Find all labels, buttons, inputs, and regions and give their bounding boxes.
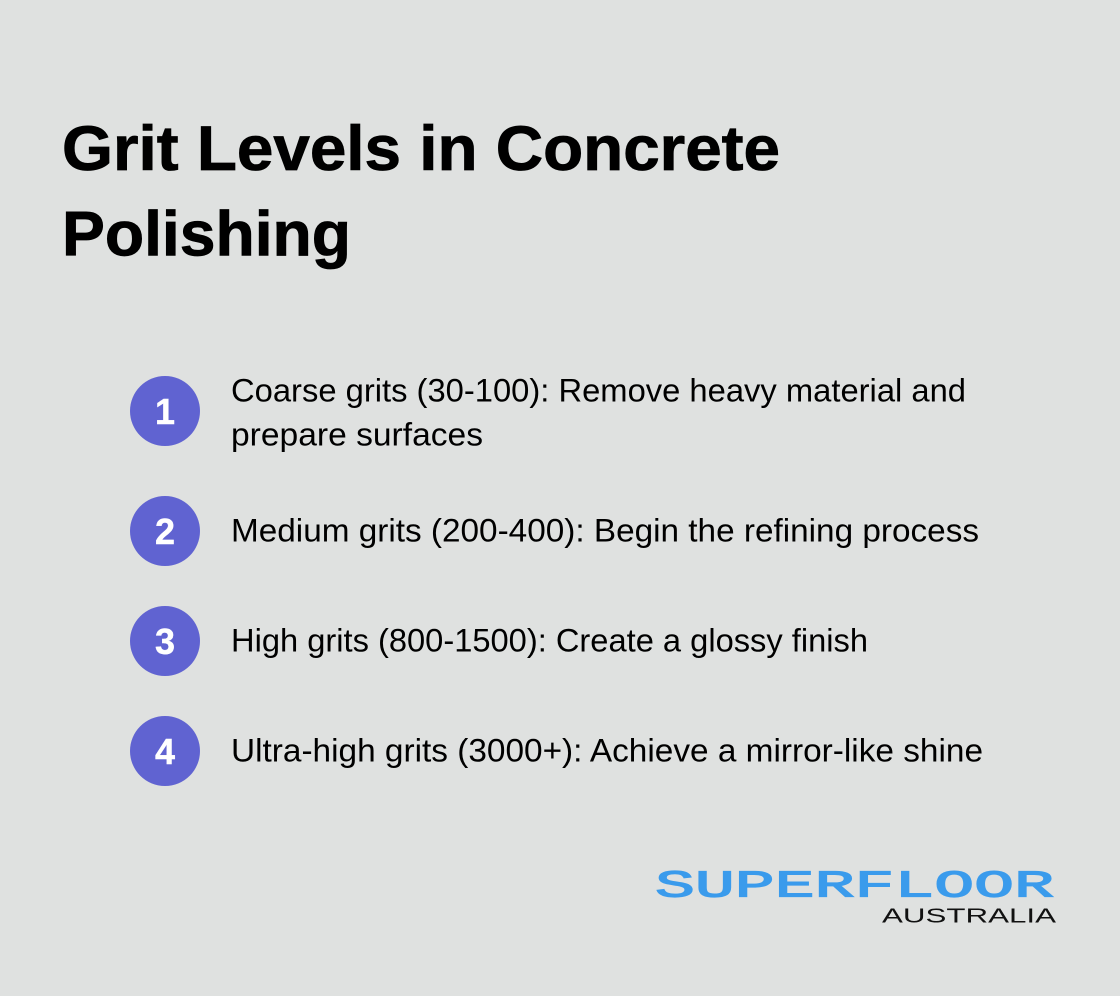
logo: Superfloor Australia: AUSTRALIA: [882, 906, 1057, 928]
item 1: coarse grits: [130, 372, 966, 452]
text: ultra-high grits: Ultra-high grits (3000+): Achieve a mirror-like shine: [231, 732, 983, 768]
number badge 2: [130, 496, 200, 566]
text: high grits: High grits (800-1500): Create a glossy finish: [231, 622, 868, 658]
item 3: high grits: [130, 606, 868, 676]
item 2: medium grits: [130, 496, 979, 566]
item 4: ultra-high grits: [130, 716, 983, 786]
number badge 2: 2: [155, 511, 175, 552]
number badge 4: 4: [155, 731, 175, 772]
title: Grit Levels in Concrete: [62, 114, 780, 184]
number badge 3: 3: [155, 621, 175, 662]
text: medium grits: Medium grits (200-400): Begin the refining process: [231, 512, 979, 548]
number badge 4: [130, 716, 200, 786]
text: coarse grits: prepare surfaces: [231, 416, 483, 452]
text: coarse grits: [231, 372, 966, 452]
number badge 1: [130, 376, 200, 446]
logo: Superfloor Australia: [655, 866, 1057, 928]
title: [62, 114, 780, 270]
list of grit levels: [130, 372, 983, 786]
text: coarse grits: Coarse grits (30-100): Remove heavy material and: [231, 372, 966, 408]
title: Polishing: [62, 200, 351, 270]
logo: Superfloor Australia: SUPERFLOOR: [655, 866, 1054, 908]
number badge 1: 1: [155, 391, 175, 432]
number badge 3: [130, 606, 200, 676]
